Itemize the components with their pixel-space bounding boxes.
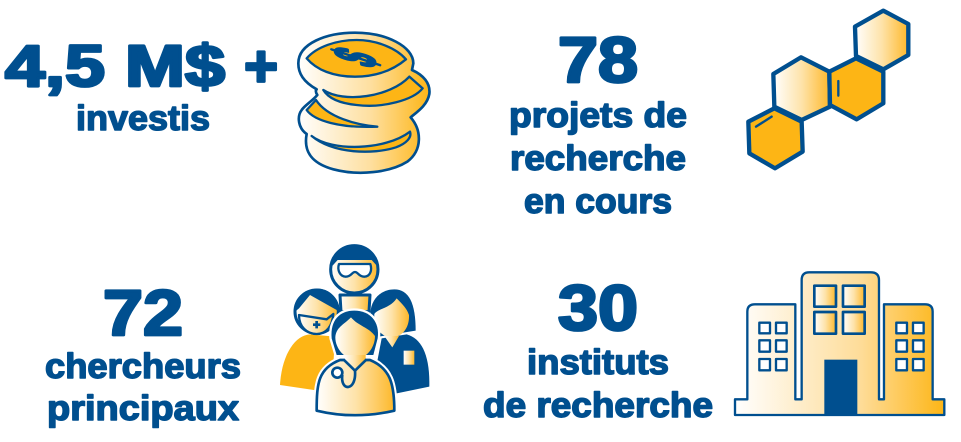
icon: stack of coins xyxy=(298,33,429,173)
statistic: investment xyxy=(5,34,278,138)
number 78: 78 xyxy=(558,24,638,96)
label: chercheurs principaux: chercheurs xyxy=(45,347,241,386)
label: instituts de recherche: instituts xyxy=(527,343,669,382)
front person xyxy=(317,311,394,415)
left person with mask xyxy=(280,289,339,393)
lower crescent xyxy=(312,132,410,152)
statistic: research institutes xyxy=(483,272,713,425)
left windows xyxy=(759,323,787,370)
label: investis: investis xyxy=(76,99,210,138)
label: projets de recherche en cours: projets de xyxy=(509,96,687,135)
middle crescent xyxy=(307,100,377,127)
right person xyxy=(370,289,429,393)
label: projets de recherche en cours: en cours xyxy=(524,182,672,221)
coin stack silhouette xyxy=(298,33,429,173)
amount heading: + xyxy=(244,34,278,99)
number 72: 72 xyxy=(103,277,183,349)
top person xyxy=(331,245,378,312)
icon: hospital buildings xyxy=(735,272,944,416)
statistic: research projects xyxy=(509,24,687,221)
right windows xyxy=(896,323,924,370)
top coin face xyxy=(307,40,406,77)
number 30: 30 xyxy=(558,272,638,344)
label: instituts de recherche xyxy=(483,343,713,425)
building outline xyxy=(735,272,944,415)
label: projets de recherche en cours: recherche xyxy=(510,139,686,178)
label: instituts de recherche: de recherche xyxy=(483,386,713,425)
upper crescent xyxy=(323,77,423,106)
icon: team of health researchers xyxy=(280,245,429,415)
label: chercheurs principaux: principaux xyxy=(47,389,240,428)
statistic: principal researchers xyxy=(45,277,241,428)
large windows xyxy=(814,286,865,334)
icon: molecule hexagons xyxy=(748,11,908,168)
dollar sign: $ xyxy=(320,41,390,74)
label: projets de recherche en cours xyxy=(509,96,687,221)
label: chercheurs principaux xyxy=(45,347,241,428)
door xyxy=(824,360,857,416)
amount heading: 4,5 M$ xyxy=(5,34,225,99)
